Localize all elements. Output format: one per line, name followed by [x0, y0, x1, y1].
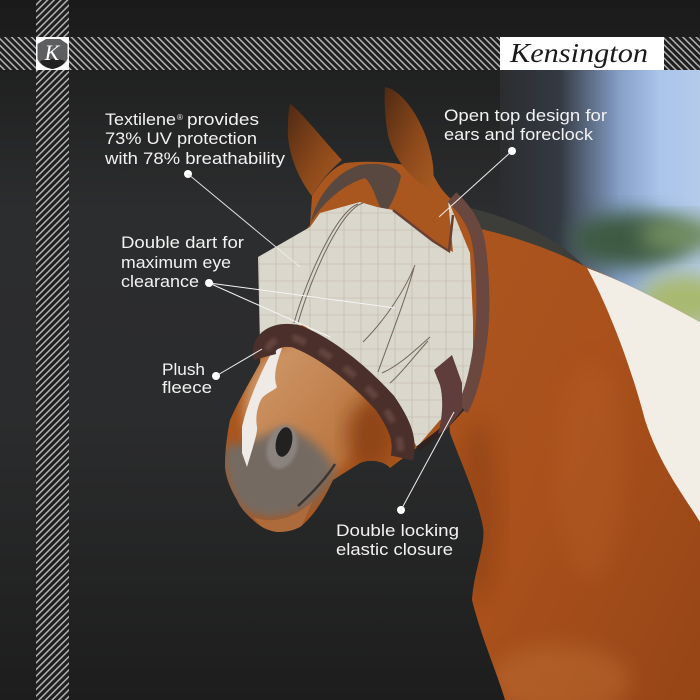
callout: double dart: Double dart for [121, 233, 244, 252]
right ear [385, 87, 434, 190]
brow piping [393, 210, 453, 251]
icon: Kensington K shield logo [36, 37, 69, 70]
eye darts [294, 203, 430, 383]
striped horizontal band [0, 37, 700, 70]
brand logo: Kensington [500, 37, 664, 70]
callout: Textilene: ® [177, 113, 183, 122]
callout: double dart: maximum eye [121, 253, 231, 272]
callout: elastic closure: elastic closure [336, 540, 453, 559]
callout: elastic closure: Double locking [336, 521, 459, 540]
forelock [311, 164, 401, 222]
fly mask [258, 197, 483, 458]
brand logo: Kensington: Kensington [509, 38, 648, 68]
blurred sky and foliage background [500, 70, 700, 322]
fleece highlights [268, 338, 400, 452]
fleece noseband [264, 335, 403, 458]
callout: Textilene: with 78% breathability [104, 149, 286, 168]
callout: Textilene: provides [187, 110, 259, 129]
callout: elastic closure [336, 412, 459, 559]
callout: plush fleece: Plush [162, 360, 205, 379]
left ear [288, 104, 342, 196]
callout: Textilene [104, 110, 300, 267]
head [225, 162, 453, 532]
callout: double dart: clearance [121, 272, 199, 291]
callout: open top design: ears and foreclock [444, 125, 594, 144]
horse illustration [210, 87, 700, 700]
horse neck and body [450, 200, 700, 700]
callout: plush fleece: fleece [162, 378, 212, 397]
mesh panel [258, 200, 473, 447]
callout: Textilene: Textilene [105, 110, 176, 129]
elastic under strap [418, 408, 462, 449]
callout: double dart [121, 233, 395, 337]
striped vertical band [36, 0, 69, 700]
elastic closure strap [434, 355, 462, 434]
callout: open top design [439, 106, 607, 217]
crest mane [470, 208, 584, 266]
icon: Kensington K shield logo: K [44, 40, 61, 65]
side binding [452, 197, 483, 410]
callout: Textilene: 73% UV protection [105, 129, 257, 148]
callout: plush fleece [162, 349, 262, 397]
callout: open top design: Open top design for [444, 106, 607, 125]
